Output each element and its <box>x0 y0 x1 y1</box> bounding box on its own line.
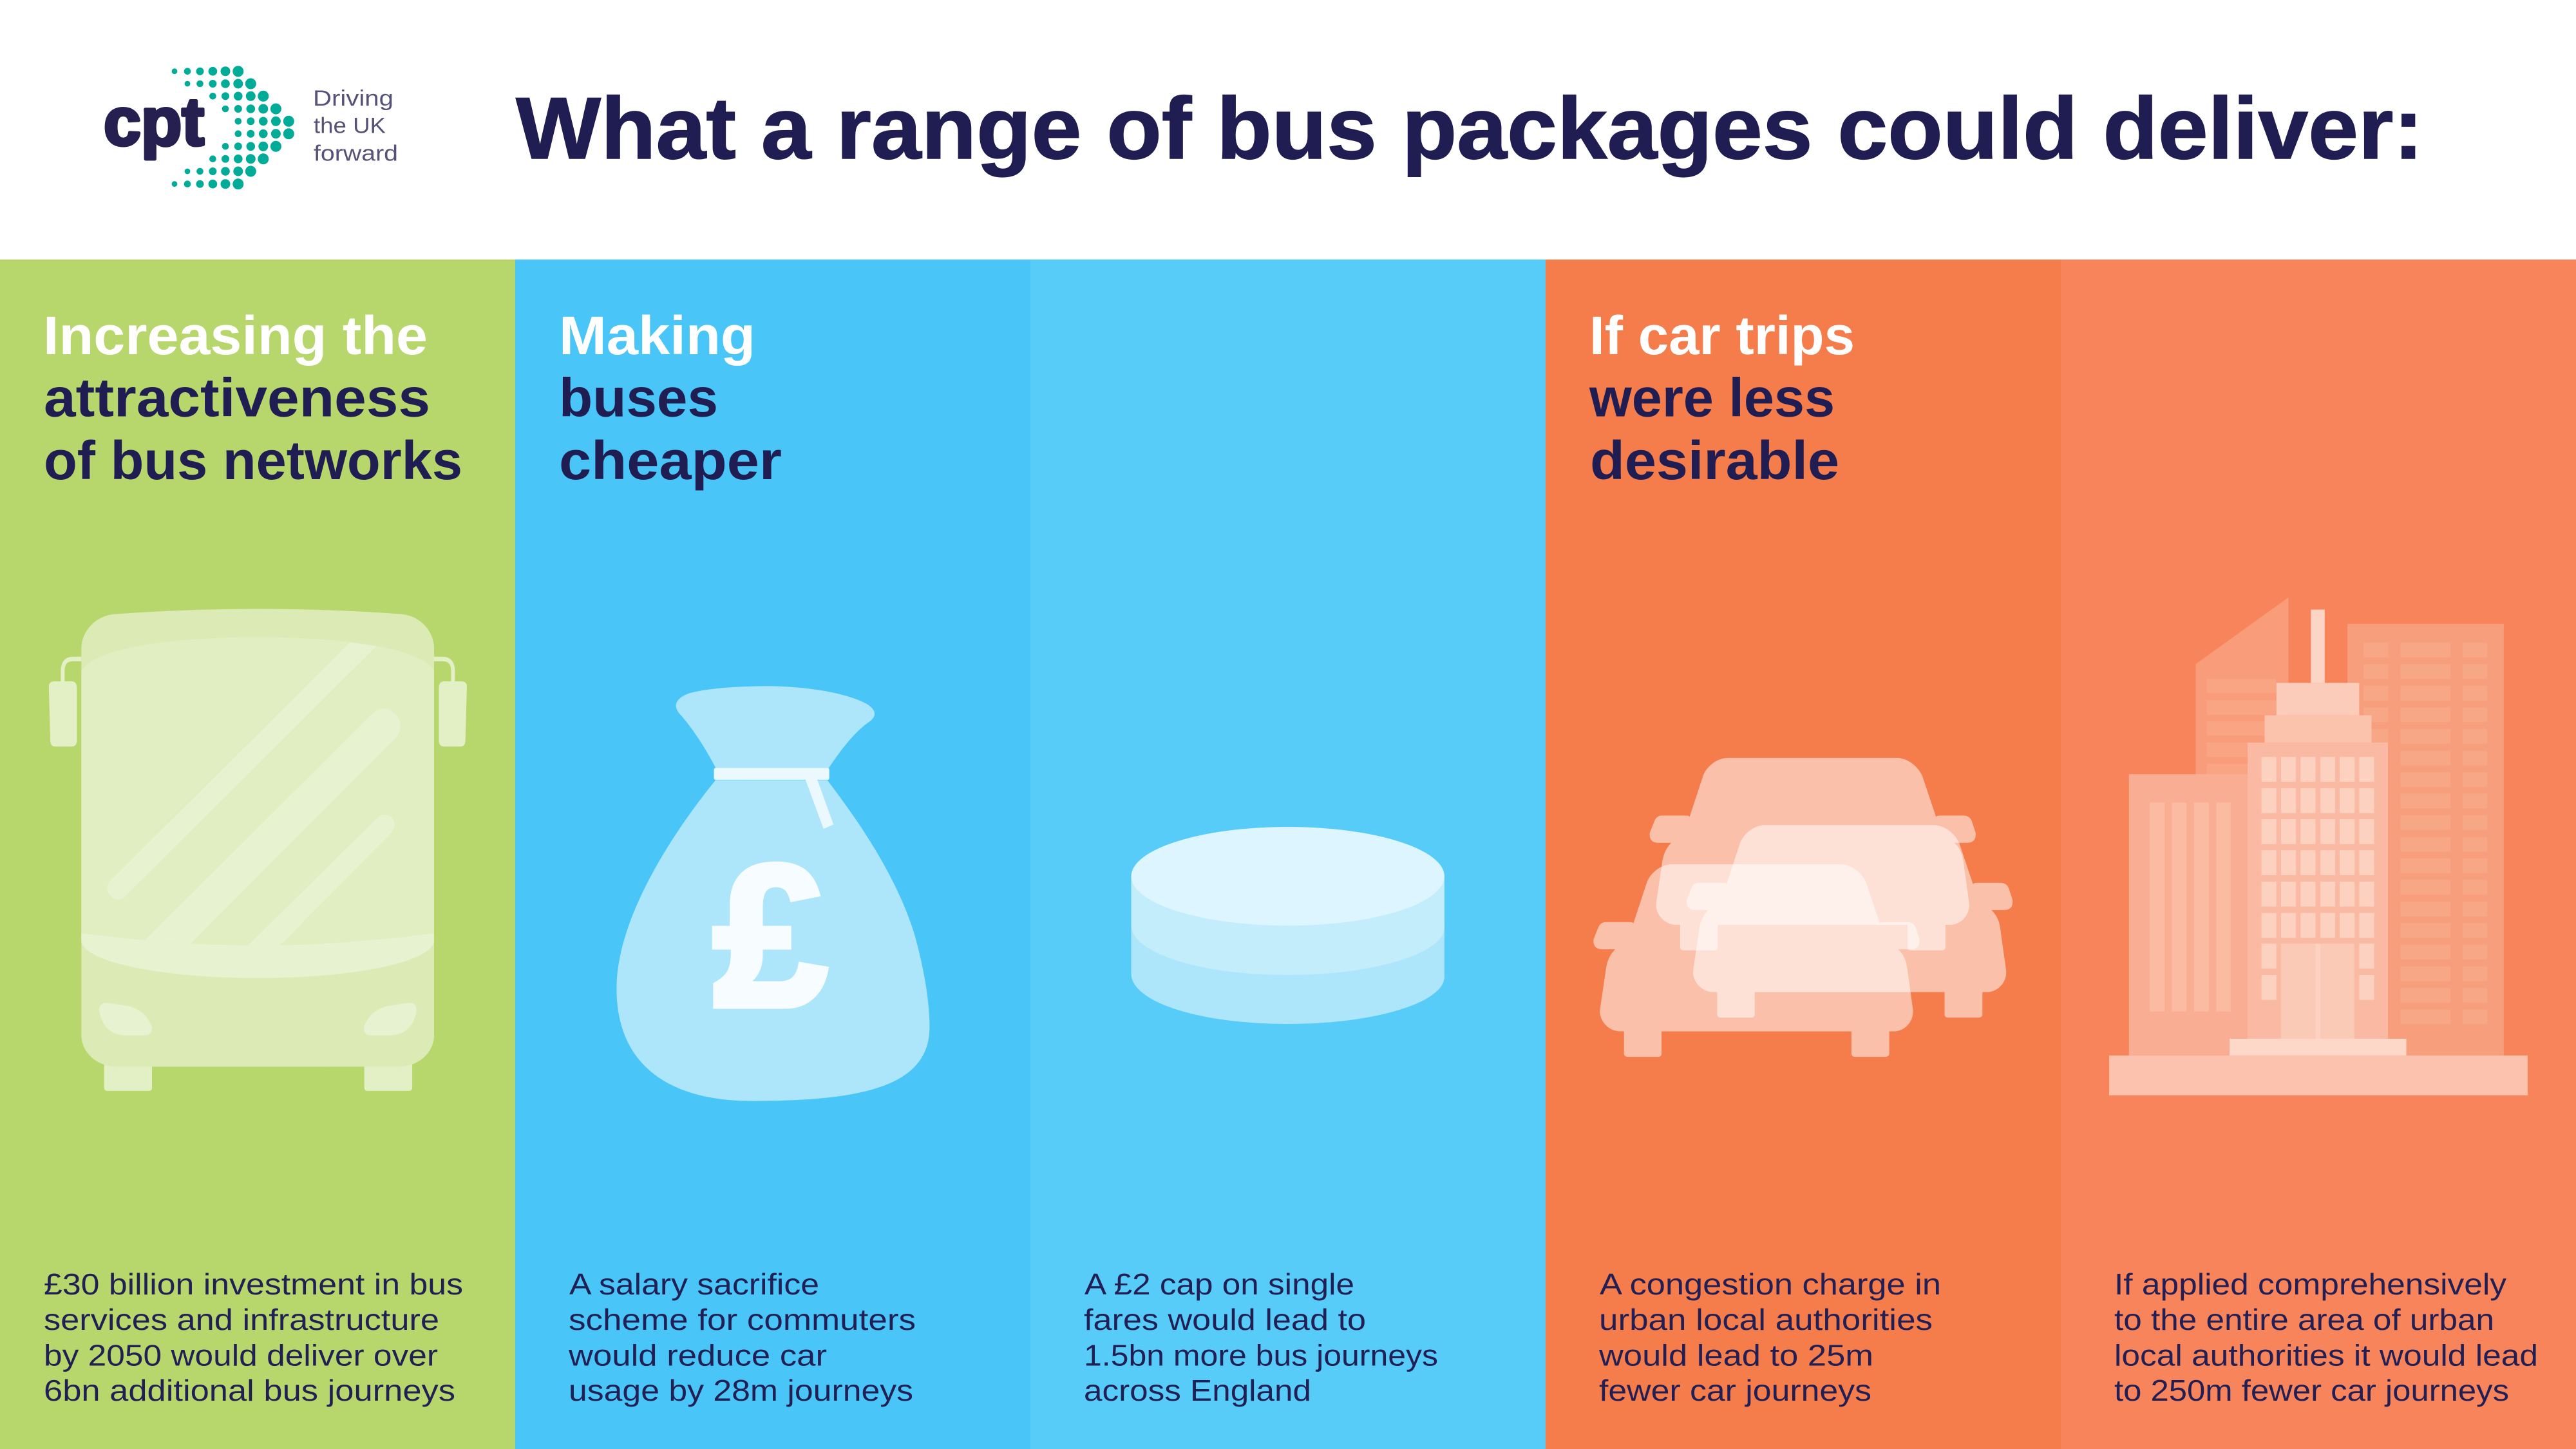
icon: pound sign: £ <box>714 824 827 1048</box>
heading: car trips less desirable: desirable <box>1590 430 1839 491</box>
heading: network attractiveness <box>43 305 462 491</box>
logo tagline <box>313 86 398 166</box>
heading: making buses cheaper: buses <box>559 368 718 428</box>
text: congestion charge <box>1598 1267 1941 1407</box>
panel: if car trips were less desirable, congestion charge <box>1546 260 2061 1449</box>
text: comprehensive application: If applied comprehensively <box>2114 1267 2506 1301</box>
text: salary sacrifice: scheme for commuters <box>569 1303 916 1336</box>
panel: comprehensive urban charge <box>2061 260 2576 1449</box>
icon: money bag <box>616 686 929 1101</box>
heading: network attractiveness: of bus networks <box>44 430 462 491</box>
text: bus investment: £30 billion investment in bus <box>44 1267 463 1301</box>
logo tagline: the UK <box>314 114 386 138</box>
text: salary sacrifice <box>568 1267 916 1407</box>
heading: car trips less desirable <box>1589 305 1855 491</box>
heading: making buses cheaper: cheaper <box>559 430 782 491</box>
heading: car trips less desirable: If car trips <box>1589 305 1855 366</box>
icon: coin <box>1132 827 1444 1024</box>
text: bus investment: services and infrastructure <box>44 1303 439 1336</box>
text: fare cap: A £2 cap on single <box>1084 1267 1354 1301</box>
heading: making buses cheaper <box>559 305 782 491</box>
logo icon: dotted arrow <box>172 66 294 189</box>
logo tagline: Driving <box>313 86 393 111</box>
text: congestion charge: urban local authorities <box>1599 1303 1933 1336</box>
text: salary sacrifice: A salary sacrifice <box>569 1267 819 1301</box>
heading: making buses cheaper: Making <box>559 305 755 366</box>
text: fare cap <box>1084 1267 1438 1407</box>
text: fare cap: across England <box>1084 1374 1311 1407</box>
icon: three cars <box>1593 758 2012 1057</box>
text: comprehensive application: local authorities it would lead <box>2114 1338 2538 1372</box>
text: comprehensive application <box>2114 1267 2538 1407</box>
text: fare cap: 1.5bn more bus journeys <box>1084 1338 1438 1372</box>
text: comprehensive application: to the entire area of urban <box>2114 1303 2494 1336</box>
text: salary sacrifice: usage by 28m journeys <box>569 1374 913 1407</box>
heading: network attractiveness: Increasing the <box>43 305 428 366</box>
logo wordmark: cpt <box>104 84 204 160</box>
logo: cpt Driving the UK forward <box>104 66 398 189</box>
text: congestion charge: A congestion charge in <box>1600 1267 1941 1301</box>
panel: £2 fare cap <box>1030 260 1546 1449</box>
title: What a range of bus packages could deliver: <box>516 79 2423 177</box>
text: fare cap: fares would lead to <box>1084 1303 1366 1336</box>
logo tagline: forward <box>314 141 398 166</box>
heading: car trips less desirable: were less <box>1589 368 1835 428</box>
icon: bus <box>49 609 467 1091</box>
text: comprehensive application: to 250m fewer car journeys <box>2114 1374 2509 1407</box>
text: bus investment: 6bn additional bus journeys <box>44 1374 455 1407</box>
text: congestion charge: would lead to 25m <box>1598 1338 1873 1372</box>
text: salary sacrifice: would reduce car <box>568 1338 827 1372</box>
panel: making buses cheaper, salary sacrifice <box>515 260 1030 1449</box>
text: congestion charge: fewer car journeys <box>1599 1374 1871 1407</box>
panel: increasing the attractiveness of bus networks <box>0 260 515 1449</box>
text: bus investment <box>44 1267 463 1407</box>
text: bus investment: by 2050 would deliver over <box>44 1338 438 1372</box>
icon: city buildings <box>2109 598 2528 1095</box>
heading: network attractiveness: attractiveness <box>44 368 430 428</box>
